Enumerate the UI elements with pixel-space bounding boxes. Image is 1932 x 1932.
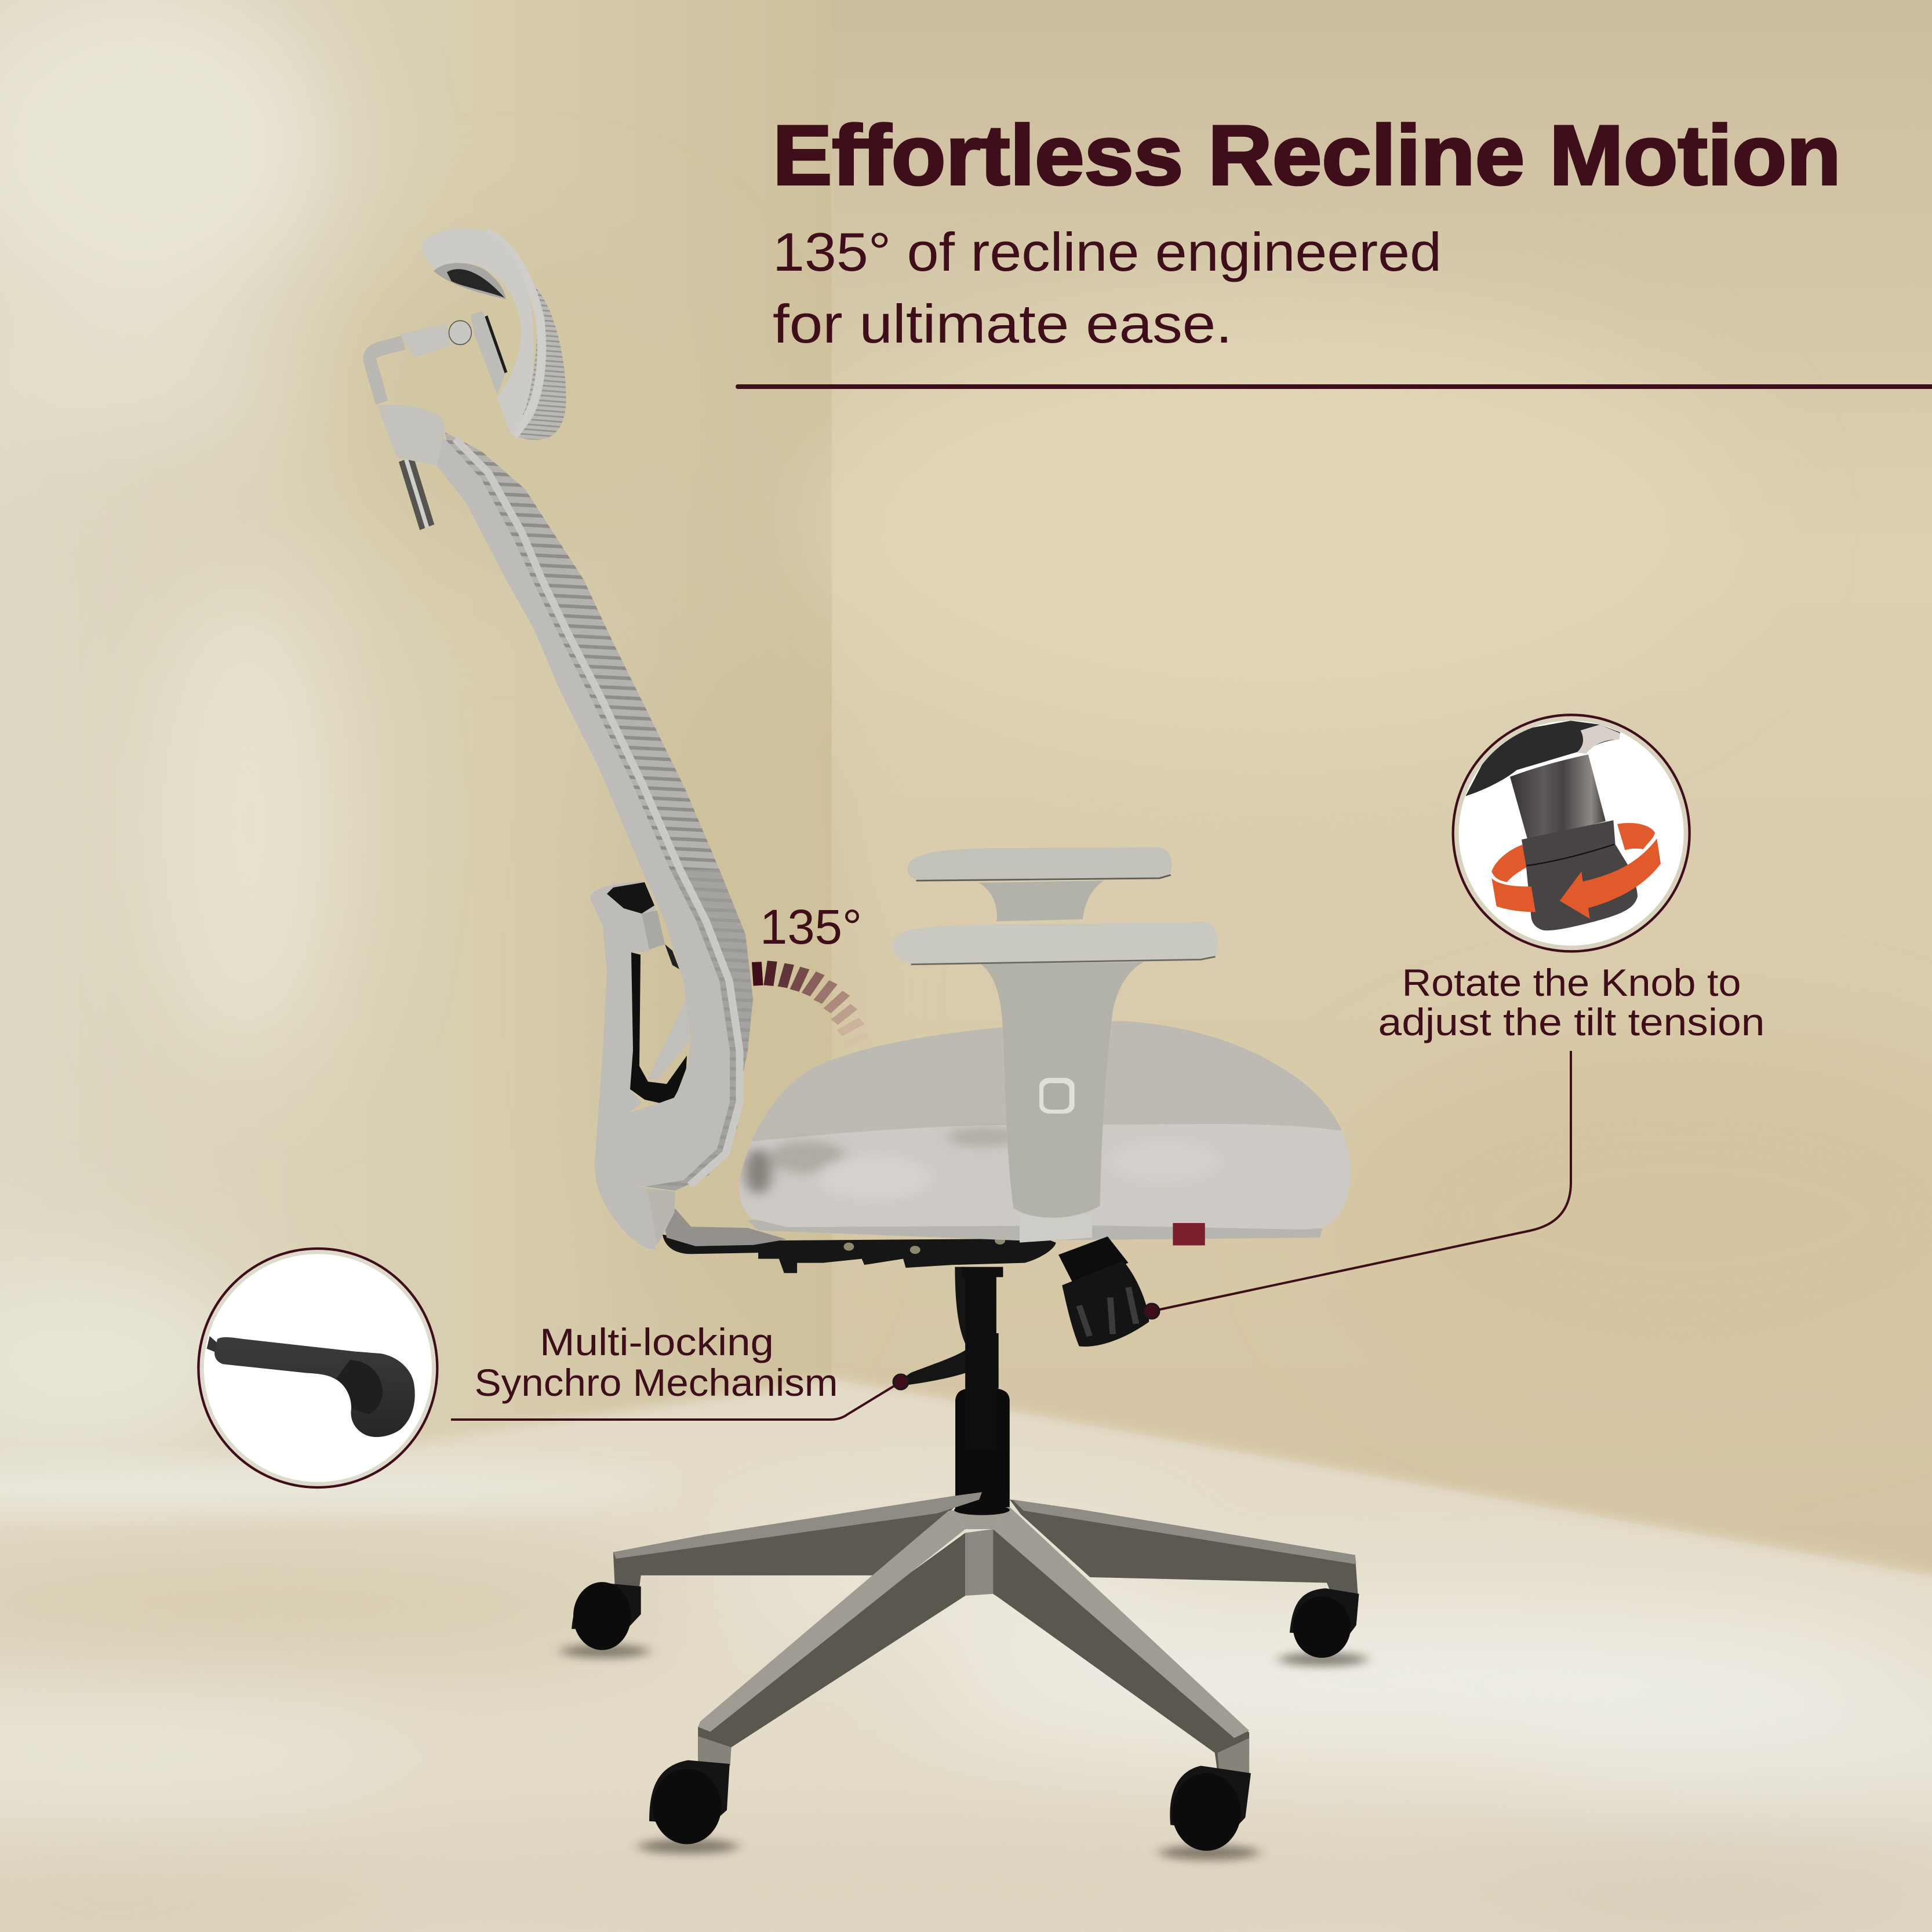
knob inset: stem [1510, 755, 1606, 842]
subtitle: 135° of recline engineered [773, 221, 1442, 282]
synchro lever callout line [451, 1374, 908, 1420]
synchro lever [903, 1267, 987, 1385]
backrest mesh [445, 432, 753, 1191]
front armrest [892, 922, 1218, 1243]
title: Effortless Recline Motion [773, 108, 1841, 202]
headrest and neck bracket [370, 228, 566, 527]
brand tag [1173, 1223, 1205, 1246]
knob inset: rear of rotation arrow [1491, 823, 1655, 882]
synchro mechanism label: Multi-locking [540, 1320, 774, 1363]
backrest frame strip [407, 419, 730, 1187]
subtitle: for ultimate ease. [773, 293, 1232, 354]
central post [962, 1267, 1003, 1449]
seat tray and hinge [647, 1188, 787, 1246]
inset: tilt tension knob [1453, 715, 1690, 951]
lever inset: handle body [214, 1337, 415, 1437]
lever inset: thumb recess [336, 1360, 383, 1414]
chair [370, 228, 1367, 1860]
tilt knob label: Rotate the Knob to [1402, 961, 1741, 1004]
inset: synchro lever handle [198, 1249, 437, 1487]
lever inset: cable stub [207, 1336, 217, 1352]
tilt knob callout line [1144, 1051, 1571, 1319]
tilt knob label: adjust the tilt tension [1378, 1000, 1764, 1043]
tilt tension knob [1058, 1236, 1149, 1347]
knob inset: textured grip [1522, 820, 1638, 930]
knob inset: mounting arm [1465, 721, 1620, 796]
tilt knob label [1378, 961, 1764, 1043]
rear armrest [907, 847, 1172, 921]
recline angle ticks [756, 961, 867, 1045]
seat pan [748, 1220, 1322, 1240]
seat cushion [730, 1015, 1361, 1235]
synchro mechanism label: Synchro Mechanism [474, 1361, 838, 1404]
synchro mechanism label [474, 1320, 838, 1404]
caster shadows [561, 1644, 1367, 1860]
seat, armrests and mechanism [647, 847, 1361, 1449]
chair base with casters and gas lift [572, 1333, 1359, 1851]
header divider line [738, 384, 1932, 389]
knob inset: chrome bracket [1577, 725, 1620, 754]
under-seat mechanism [663, 1235, 1056, 1273]
subtitle [773, 221, 1442, 354]
knob inset: front of rotation arrow [1491, 839, 1661, 919]
rear lumbar support frame [590, 881, 690, 1250]
recline angle label: 135° [760, 900, 862, 954]
